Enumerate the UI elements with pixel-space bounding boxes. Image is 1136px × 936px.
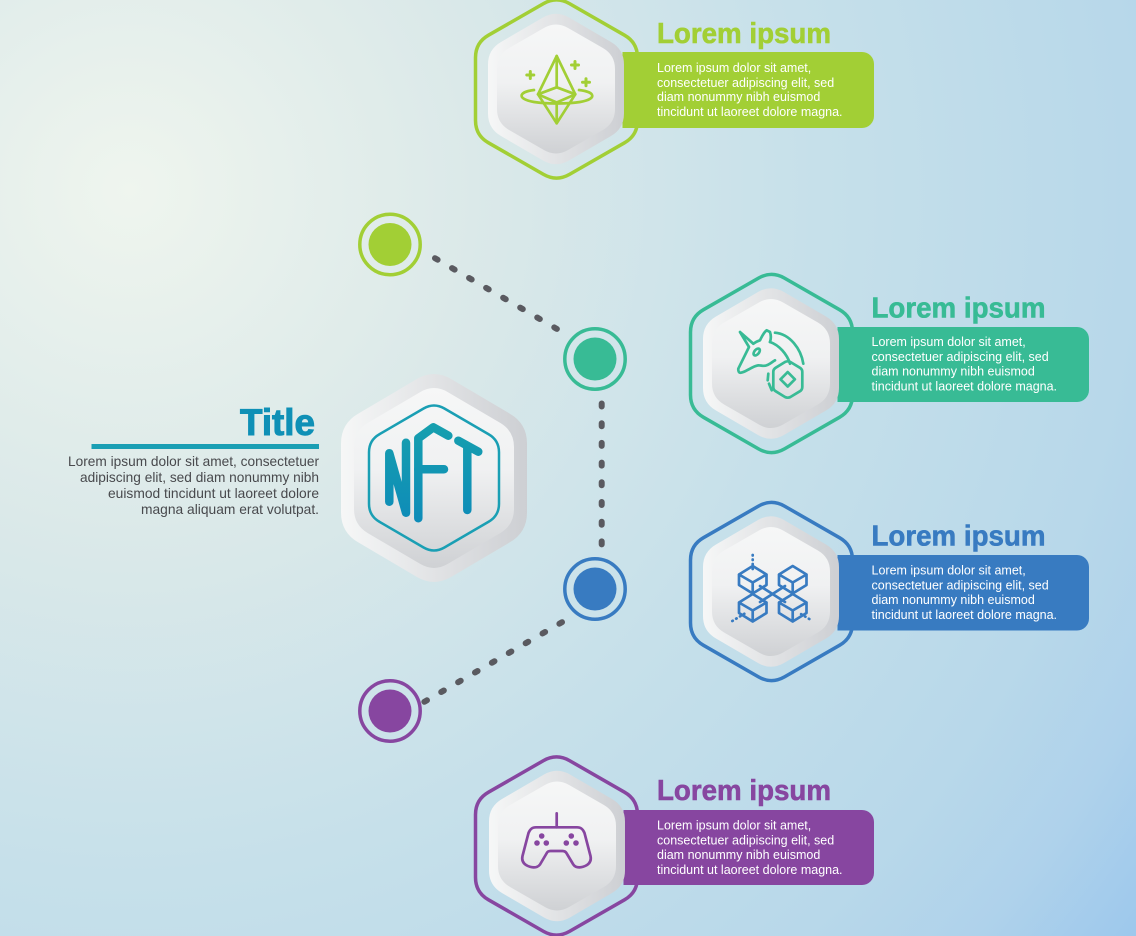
body text: tincidunt ut laoreet dolore magna. [657,863,843,877]
body text: consectetuer adipiscing elit, sed [657,834,834,848]
icon: game controller [522,813,591,867]
heading: Lorem ipsum [872,292,1046,324]
icon: ethereum [522,56,592,123]
title: Title [240,402,315,443]
body text: Lorem ipsum dolor sit amet, [657,61,811,75]
body text: tincidunt ut laoreet dolore magna. [872,380,1057,394]
central NFT hexagon [341,374,527,582]
body text: diam nonummy nibh euismod [657,90,820,104]
body text: diam nonummy nibh euismod [872,593,1035,607]
heading: Lorem ipsum [657,18,831,50]
panel: blue [690,502,1089,681]
icon: unicorn [738,330,803,398]
node: blue [565,559,625,619]
body text: diam nonummy nibh euismod [657,848,820,862]
body text: tincidunt ut laoreet dolore magna. [657,105,843,119]
body text: Lorem ipsum dolor sit amet, [872,335,1026,349]
icon: blockchain cubes [732,555,809,622]
body text: diam nonummy nibh euismod [872,364,1035,378]
heading: Lorem ipsum [657,775,831,807]
connector: blue to purple [424,622,562,702]
panel: teal [690,274,1089,453]
node: purple [360,681,420,741]
title underline [92,444,319,449]
body text: consectetuer adipiscing elit, sed [872,578,1049,592]
title description [68,453,319,517]
title description: euismod tincidunt ut laoreet dolore [108,485,319,501]
body text: tincidunt ut laoreet dolore magna. [872,608,1057,622]
title description: adipiscing elit, sed diam nonummy nibh [80,469,319,485]
connector: teal to blue [599,404,605,545]
title block [68,402,319,517]
node: teal [565,329,625,389]
body text: consectetuer adipiscing elit, sed [872,350,1049,364]
heading: Lorem ipsum [872,520,1046,552]
panel: green [476,0,874,178]
title description: magna aliquam erat volutpat. [141,501,319,517]
icon: NFT letterforms [389,427,478,518]
panel: purple [476,757,874,935]
body text: Lorem ipsum dolor sit amet, [657,818,811,832]
body text: Lorem ipsum dolor sit amet, [872,564,1026,578]
body text: consectetuer adipiscing elit, sed [657,76,834,90]
connector: green to teal [435,258,557,329]
node: green [360,214,420,275]
title description: Lorem ipsum dolor sit amet, consectetuer [68,453,319,469]
